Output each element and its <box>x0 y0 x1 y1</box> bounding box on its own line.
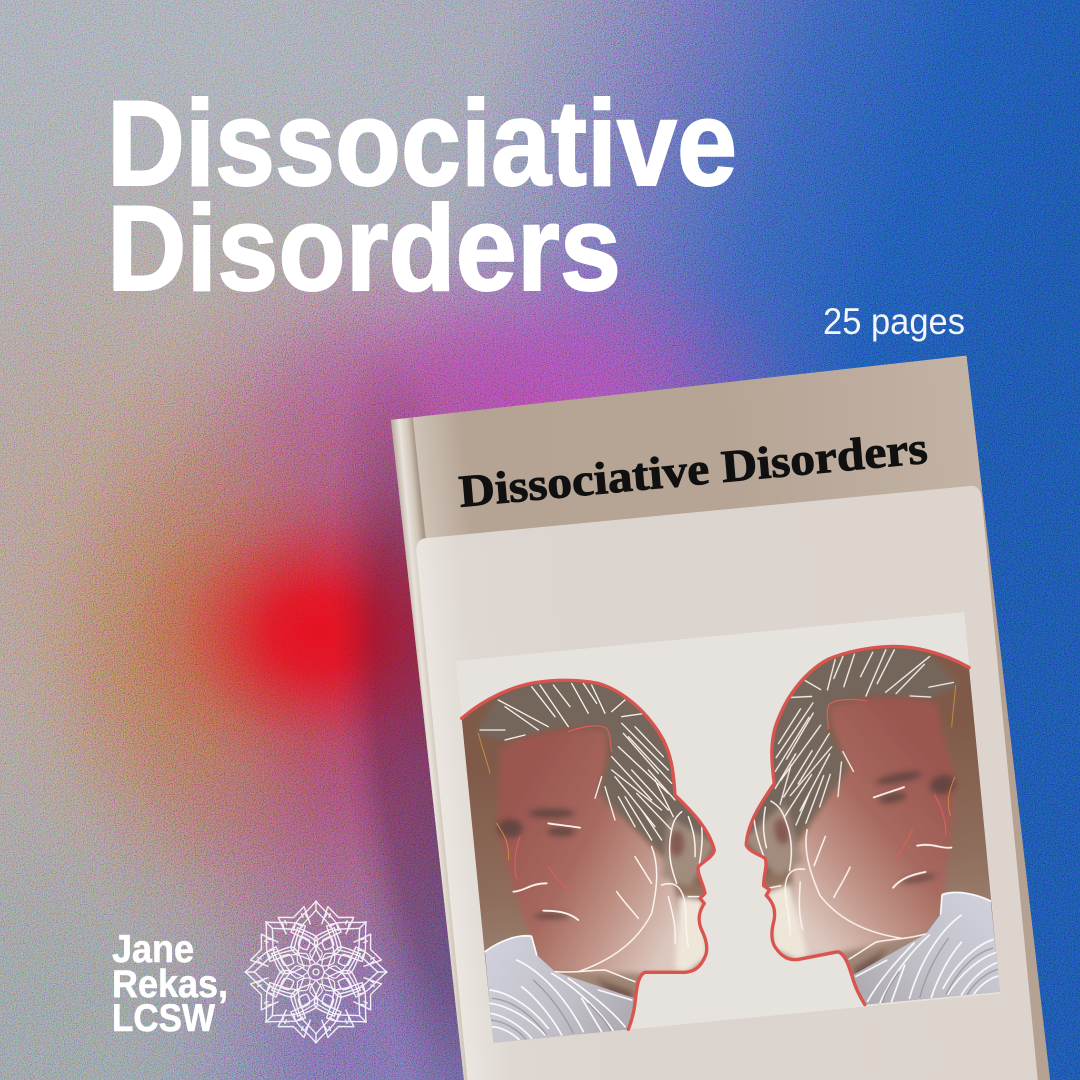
icon: mandala logo <box>245 901 387 1043</box>
page count: 25 pages <box>823 301 965 342</box>
amber contour lines <box>478 733 509 860</box>
author line 1: Jane <box>112 928 194 971</box>
book <box>391 356 1050 1080</box>
book cover <box>391 356 1050 1080</box>
shirt folds <box>485 936 632 1041</box>
left head <box>455 670 722 1047</box>
author line 2: Rekas, <box>112 963 228 1006</box>
hair strokes <box>480 683 675 840</box>
book title: Dissociative Disorders <box>457 422 929 517</box>
book spine <box>391 418 483 1080</box>
title line 1: Dissociative <box>107 75 737 211</box>
red contour lines <box>515 726 612 892</box>
hair base <box>475 680 718 890</box>
author line 3: LCSW <box>112 997 215 1040</box>
shirt <box>485 935 635 1045</box>
skin <box>497 729 688 973</box>
title <box>107 75 737 316</box>
book shadow <box>300 300 560 1080</box>
neck highlight <box>675 897 708 972</box>
title line 2: Disorders <box>107 180 621 316</box>
book top band <box>412 356 982 550</box>
face vein highlights <box>513 812 703 982</box>
author name <box>112 928 228 1040</box>
right head <box>705 619 1038 1039</box>
head outline <box>462 680 714 1029</box>
image panel <box>456 612 1000 1043</box>
face shadows <box>497 809 684 919</box>
cover inner panel <box>416 486 1038 1080</box>
